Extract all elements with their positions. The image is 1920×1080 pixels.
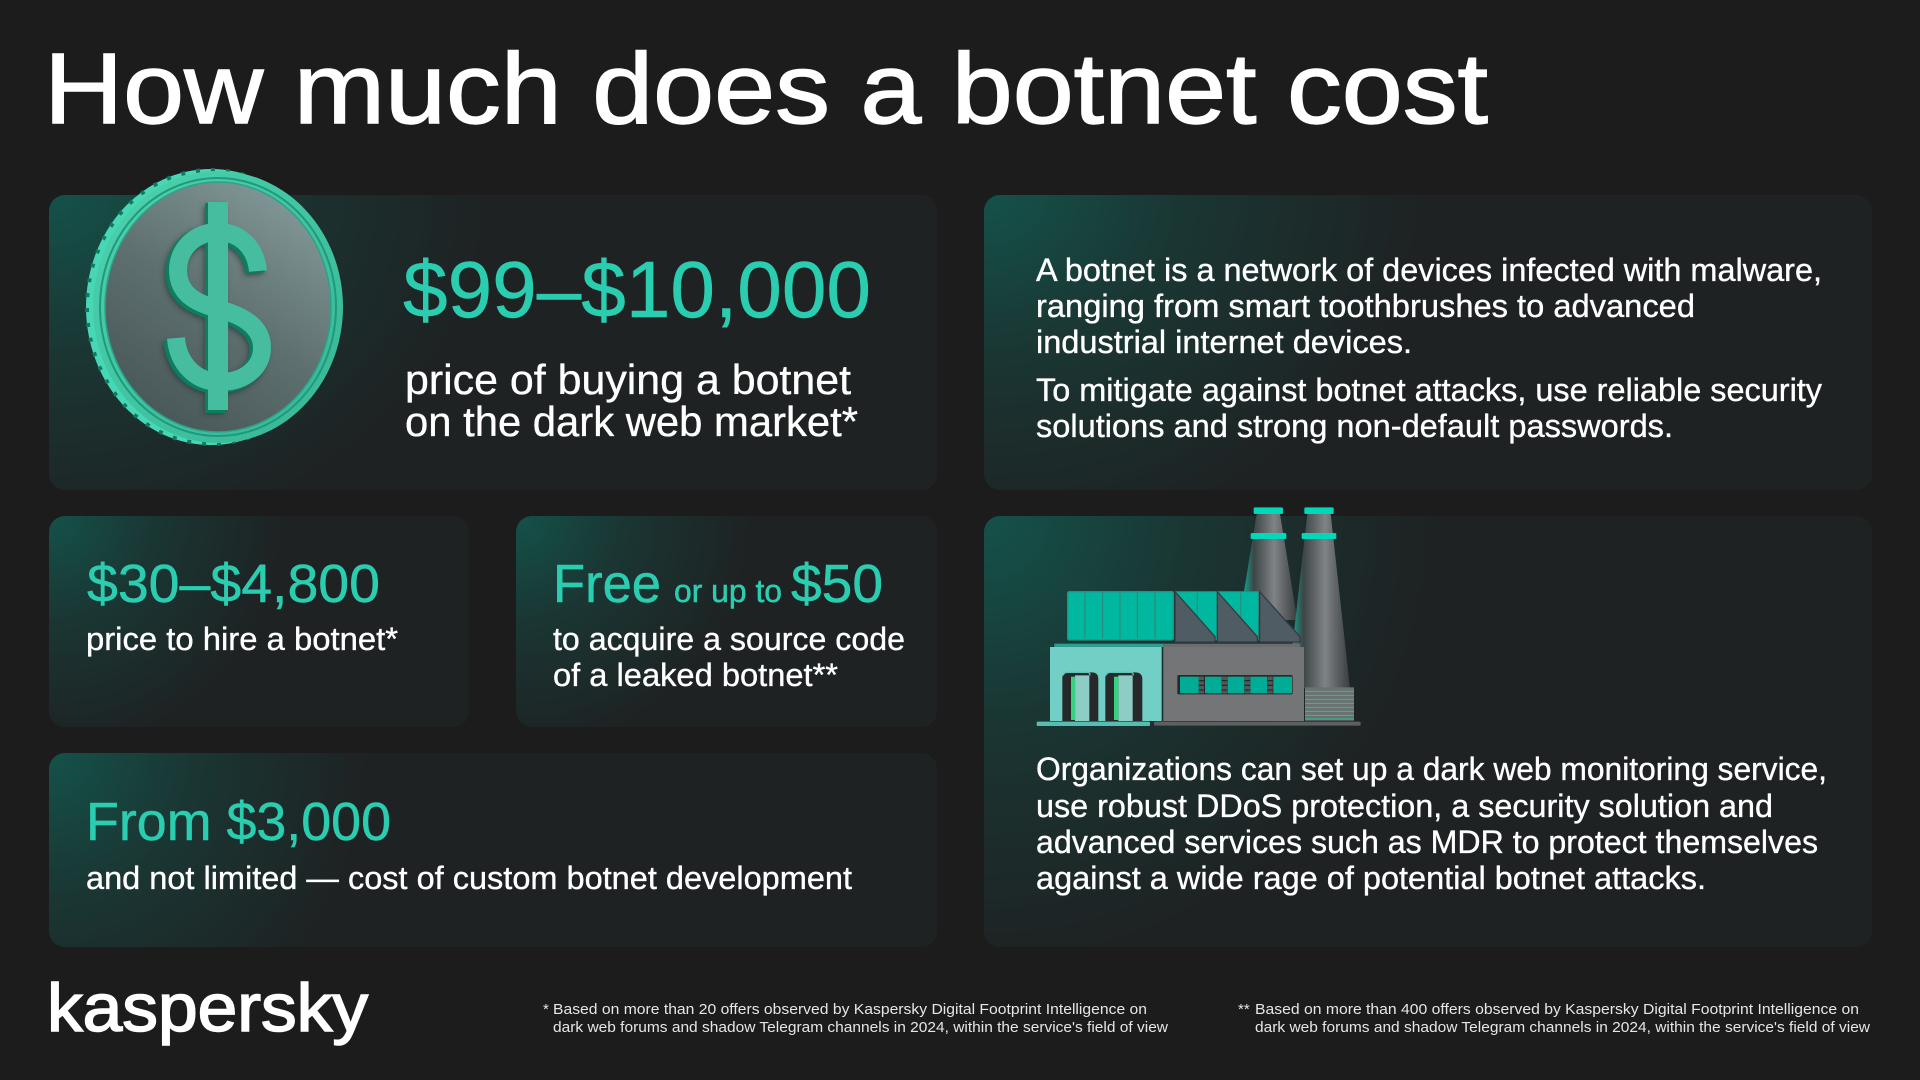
source code description [553,621,905,693]
organizations text: Organizations can set up a dark web monitoring service, [1036,751,1827,787]
icon: factory [1037,507,1361,726]
definition text: A botnet is a network of devices infected with malware, [1036,252,1822,288]
definition text [1036,252,1822,444]
price description: on the dark web market* [405,398,858,445]
organizations text: against a wide rage of potential botnet attacks. [1036,860,1706,896]
footnote 1: Based on more than 20 offers observed by Kaspersky Digital Footprint Intelligence on [553,1001,1147,1018]
organizations text [1036,751,1827,896]
panel background [984,516,1872,947]
source code price [553,554,883,614]
organizations text: advanced services such as MDR to protect themselves [1036,824,1818,860]
panel background [516,516,937,727]
source code price: $50 [791,554,883,614]
logo: kaspersky: kaspersky [47,970,368,1046]
panel: botnet purchase price [49,169,937,490]
footnote 2 [1238,1001,1870,1036]
footnote 1: * [543,1001,549,1018]
panel: botnet definition [984,195,1872,490]
footnote 2: ** [1238,1001,1250,1018]
panel background [49,753,937,947]
source code description: of a leaked botnet** [553,657,838,693]
definition text: ranging from smart toothbrushes to advanced [1036,288,1695,324]
custom description: and not limited — cost of custom botnet development [86,860,852,896]
price description [405,356,858,445]
footnote 2: Based on more than 400 offers observed by Kaspersky Digital Footprint Intelligence on [1255,1001,1859,1018]
icon: dollar coin [86,169,343,445]
definition text: To mitigate against botnet attacks, use reliable security [1036,372,1822,408]
definition text: solutions and strong non-default passwords. [1036,408,1673,444]
panel: hire a botnet [49,516,469,727]
panel: custom development [49,753,937,947]
footnote 1: dark web forums and shadow Telegram channels in 2024, within the service's field of view [553,1019,1168,1036]
panel background [984,195,1872,490]
price description: price of buying a botnet [405,356,851,403]
footnote 2: dark web forums and shadow Telegram channels in 2024, within the service's field of view [1255,1019,1870,1036]
footnote 1 [543,1001,1168,1036]
source code price: Free [553,554,661,614]
big price: $99–$10,000 [403,245,871,334]
panel: organizations [984,507,1872,947]
panel background [49,516,469,727]
panel: leaked source code [516,516,937,727]
hire price: $30–$4,800 [87,554,380,614]
source code price: or up to [674,573,782,609]
source code description: to acquire a source code [553,621,905,657]
title: How much does a botnet cost [44,33,1488,145]
organizations text: use robust DDoS protection, a security solution and [1036,788,1773,824]
definition text: industrial internet devices. [1036,324,1412,360]
hire description: price to hire a botnet* [86,621,398,657]
custom price: From $3,000 [86,792,391,852]
panel background [49,195,937,490]
